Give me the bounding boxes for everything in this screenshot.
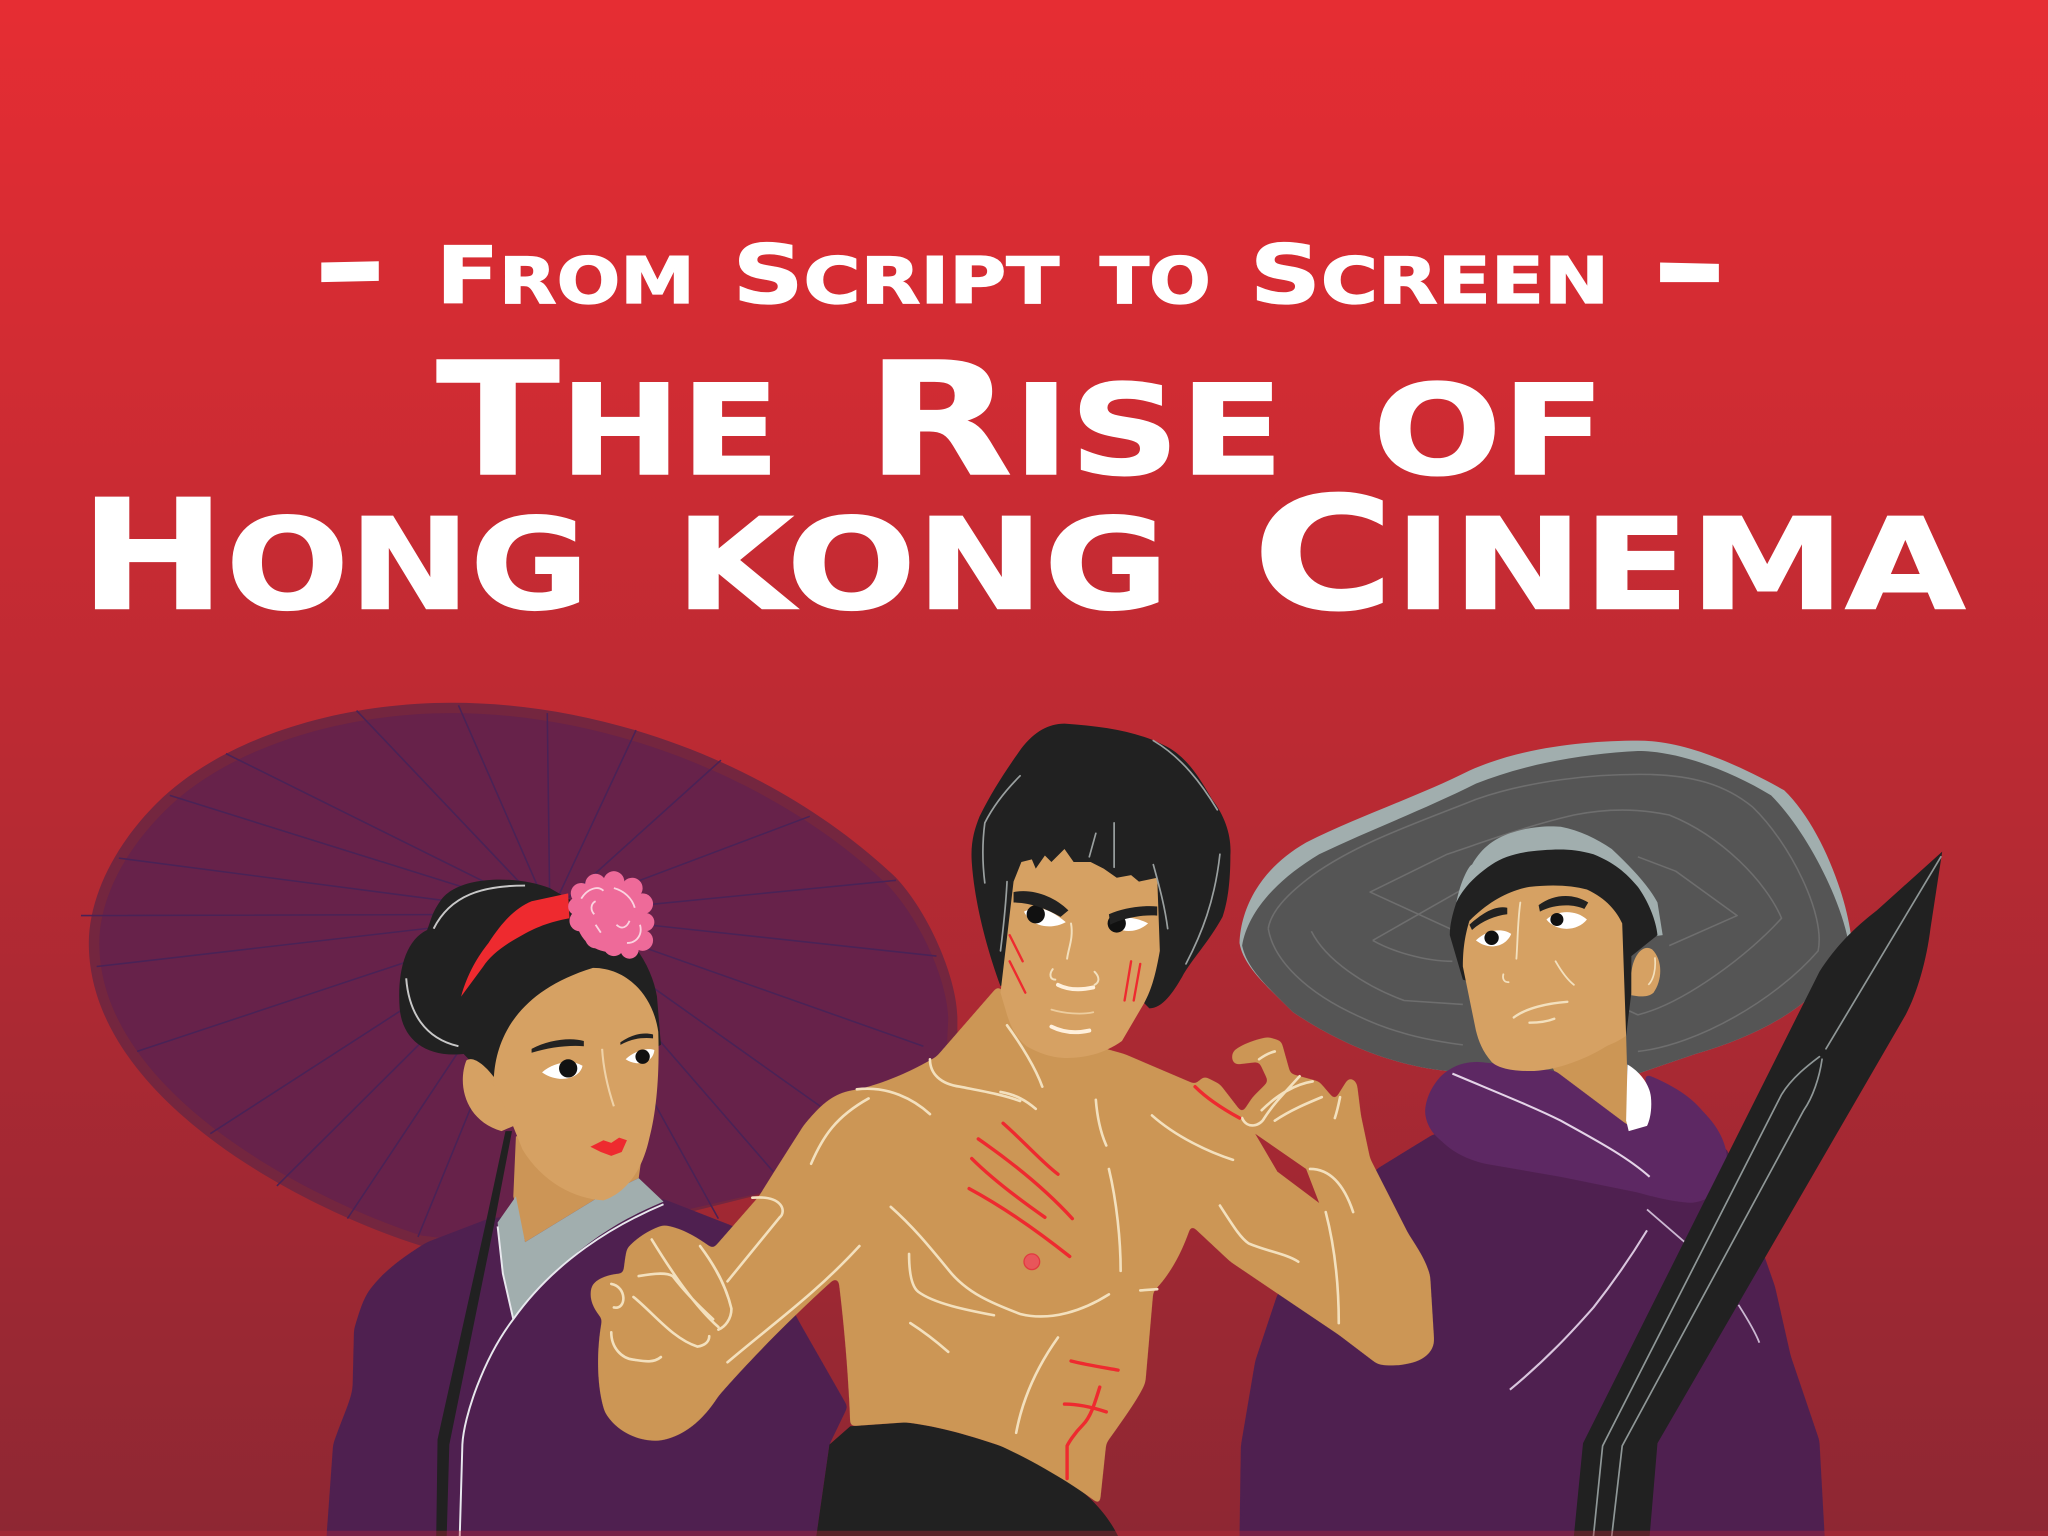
woman's robe (327, 1199, 848, 1536)
fighter's red scars (969, 1087, 1240, 1479)
swordsman's face (1463, 885, 1626, 1071)
woman's ear (463, 1059, 520, 1131)
woman's face (494, 968, 659, 1200)
title word: Hong: HONG (80, 468, 589, 646)
fighter's facial features (1010, 891, 1157, 1032)
woman's hair (399, 880, 661, 1110)
sword (1574, 852, 1942, 1536)
fighter's nipple (1024, 1254, 1040, 1270)
swordsman's robe (1240, 1134, 1825, 1536)
fighter's hair highlights (983, 741, 1220, 964)
title word: of: OF (1373, 358, 1605, 504)
woman's hair highlights (406, 886, 525, 1046)
title word: The: THE (436, 329, 780, 511)
title word: Rise: R ISE (866, 329, 1284, 511)
fighter's pants (816, 1422, 1118, 1536)
fighter's hair (972, 724, 1231, 1008)
fighter's hand lines (1242, 1051, 1340, 1125)
subtitle word: Screen: S CREEN (1250, 229, 1609, 323)
subtitle word: Script: S CRIPT (733, 229, 1060, 323)
title (80, 329, 1966, 646)
illustration: swordsman with straw hat (1240, 741, 1942, 1536)
swordsman's robe folds (1452, 1074, 1759, 1390)
swordsman's hair (1450, 850, 1657, 1036)
woman's pink flower (568, 871, 654, 959)
parasol handle (436, 1131, 512, 1536)
woman's neck (513, 1123, 647, 1242)
title word: Cinema: C INEMA (1253, 464, 1966, 646)
swordsman's facial features (1469, 896, 1588, 1023)
bottom edge band (0, 1531, 2048, 1536)
swordsman's neck (1541, 1036, 1629, 1126)
swordsman's cap (1456, 826, 1663, 940)
subtitle (321, 229, 1719, 323)
fighter's body and arms (591, 986, 1434, 1505)
swordsman's shawl (1425, 1062, 1727, 1203)
subtitle right dash (1660, 263, 1719, 282)
parasol (81, 703, 957, 1254)
swordsman's white collar (1626, 1064, 1651, 1131)
subtitle left dash (321, 261, 379, 282)
woman's collar (498, 1178, 664, 1319)
illustration: woman with parasol (81, 703, 957, 1536)
swordsman's ear (1631, 948, 1660, 996)
straw hat (1240, 741, 1851, 1075)
gap between hand and forearm (1255, 1134, 1319, 1203)
woman's facial features (532, 1033, 654, 1156)
title word: kong: KONG (675, 491, 1169, 639)
subtitle word: to: TO (1100, 245, 1211, 319)
illustration: shirtless fighter (591, 724, 1434, 1536)
fighter's muscle lines (611, 1025, 1353, 1433)
woman's red headband (461, 893, 569, 997)
fighter's face (1000, 849, 1160, 1058)
subtitle word: From: FROM (436, 231, 695, 322)
